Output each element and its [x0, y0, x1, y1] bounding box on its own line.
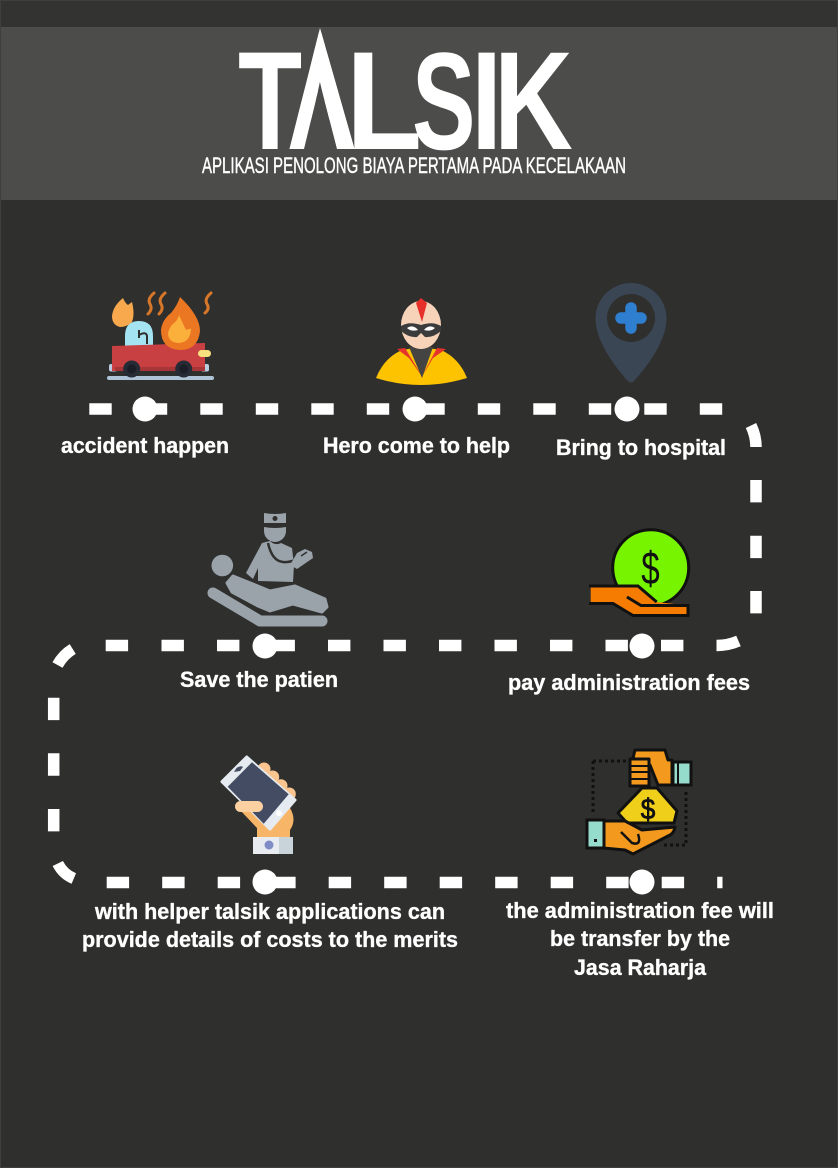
label: fee transfer by Jasa Raharja: be transfer by the	[550, 926, 730, 951]
icon: money bag handover: $	[641, 793, 655, 825]
title: T	[238, 23, 302, 180]
icon: hand with coin: $	[641, 544, 660, 594]
icon: burning car	[107, 293, 214, 380]
icon: masked hero	[376, 298, 467, 385]
label: hero come to help: Hero come to help	[323, 433, 510, 458]
title	[239, 28, 572, 150]
label: fee transfer by Jasa Raharja: the administration fee will	[506, 898, 774, 923]
icon: money bag handover	[587, 750, 691, 854]
title: L	[346, 23, 422, 180]
label: fee transfer by Jasa Raharja	[506, 898, 774, 980]
label: accident happen: accident happen	[61, 433, 229, 458]
icon: hospital map pin	[596, 283, 666, 382]
title: S	[412, 24, 475, 179]
icon: doctor treating patient	[212, 513, 327, 621]
title: I	[471, 22, 502, 179]
dashed route path	[54, 409, 756, 882]
icon: hand with coin	[589, 530, 689, 616]
subtitle: APLIKASI PENOLONG BIAYA PERTAMA PADA KECELAKAAN	[202, 153, 626, 178]
icon: hand holding phone	[222, 757, 296, 854]
label: fee transfer by Jasa Raharja: Jasa Raharja	[574, 955, 707, 980]
label: talsik application details: with helper talsik applications can	[94, 899, 445, 924]
title: A	[282, 0, 358, 185]
header band	[1, 1, 837, 200]
route stop markers	[132, 396, 654, 894]
title: K	[494, 22, 573, 179]
label: pay administration fees: pay administration fees	[508, 670, 750, 695]
label: talsik application details: provide details of costs to the merits	[82, 927, 458, 952]
label: bring to hospital: Bring to hospital	[556, 435, 726, 460]
label: talsik application details	[82, 899, 458, 952]
label: save the patien: Save the patien	[180, 667, 338, 692]
